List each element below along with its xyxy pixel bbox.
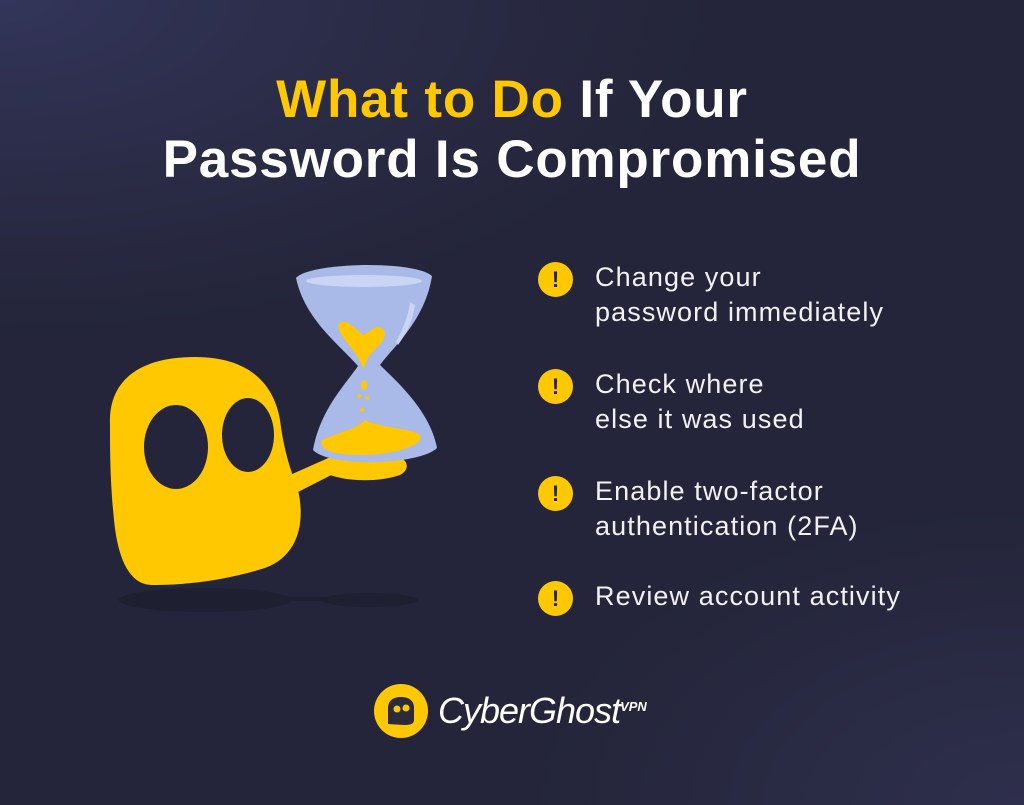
text: ! xyxy=(552,481,559,506)
text: ! xyxy=(552,374,559,399)
text: ! xyxy=(552,267,559,292)
bullet 2 xyxy=(538,369,805,434)
bullet 4 xyxy=(538,581,901,616)
text: else it was used xyxy=(595,404,805,434)
text: authentication (2FA) xyxy=(595,511,859,541)
ghost body xyxy=(110,357,407,585)
logo text: CyberGhostVPN xyxy=(438,690,647,731)
text: Check where xyxy=(595,369,765,399)
title: What to Do If Your xyxy=(276,70,748,129)
text: Change your xyxy=(595,262,762,292)
text: Enable two-factor xyxy=(595,476,824,506)
text: password immediately xyxy=(595,297,884,327)
text: ! xyxy=(552,586,559,611)
logo icon xyxy=(374,684,428,738)
text: Review account activity xyxy=(595,581,901,611)
bullet 3 xyxy=(538,476,859,541)
title xyxy=(163,70,861,189)
title: Password Is Compromised xyxy=(163,130,861,189)
shadow xyxy=(119,588,418,612)
bullet 1 xyxy=(538,262,884,327)
logo xyxy=(374,684,647,738)
hourglass xyxy=(296,265,437,462)
